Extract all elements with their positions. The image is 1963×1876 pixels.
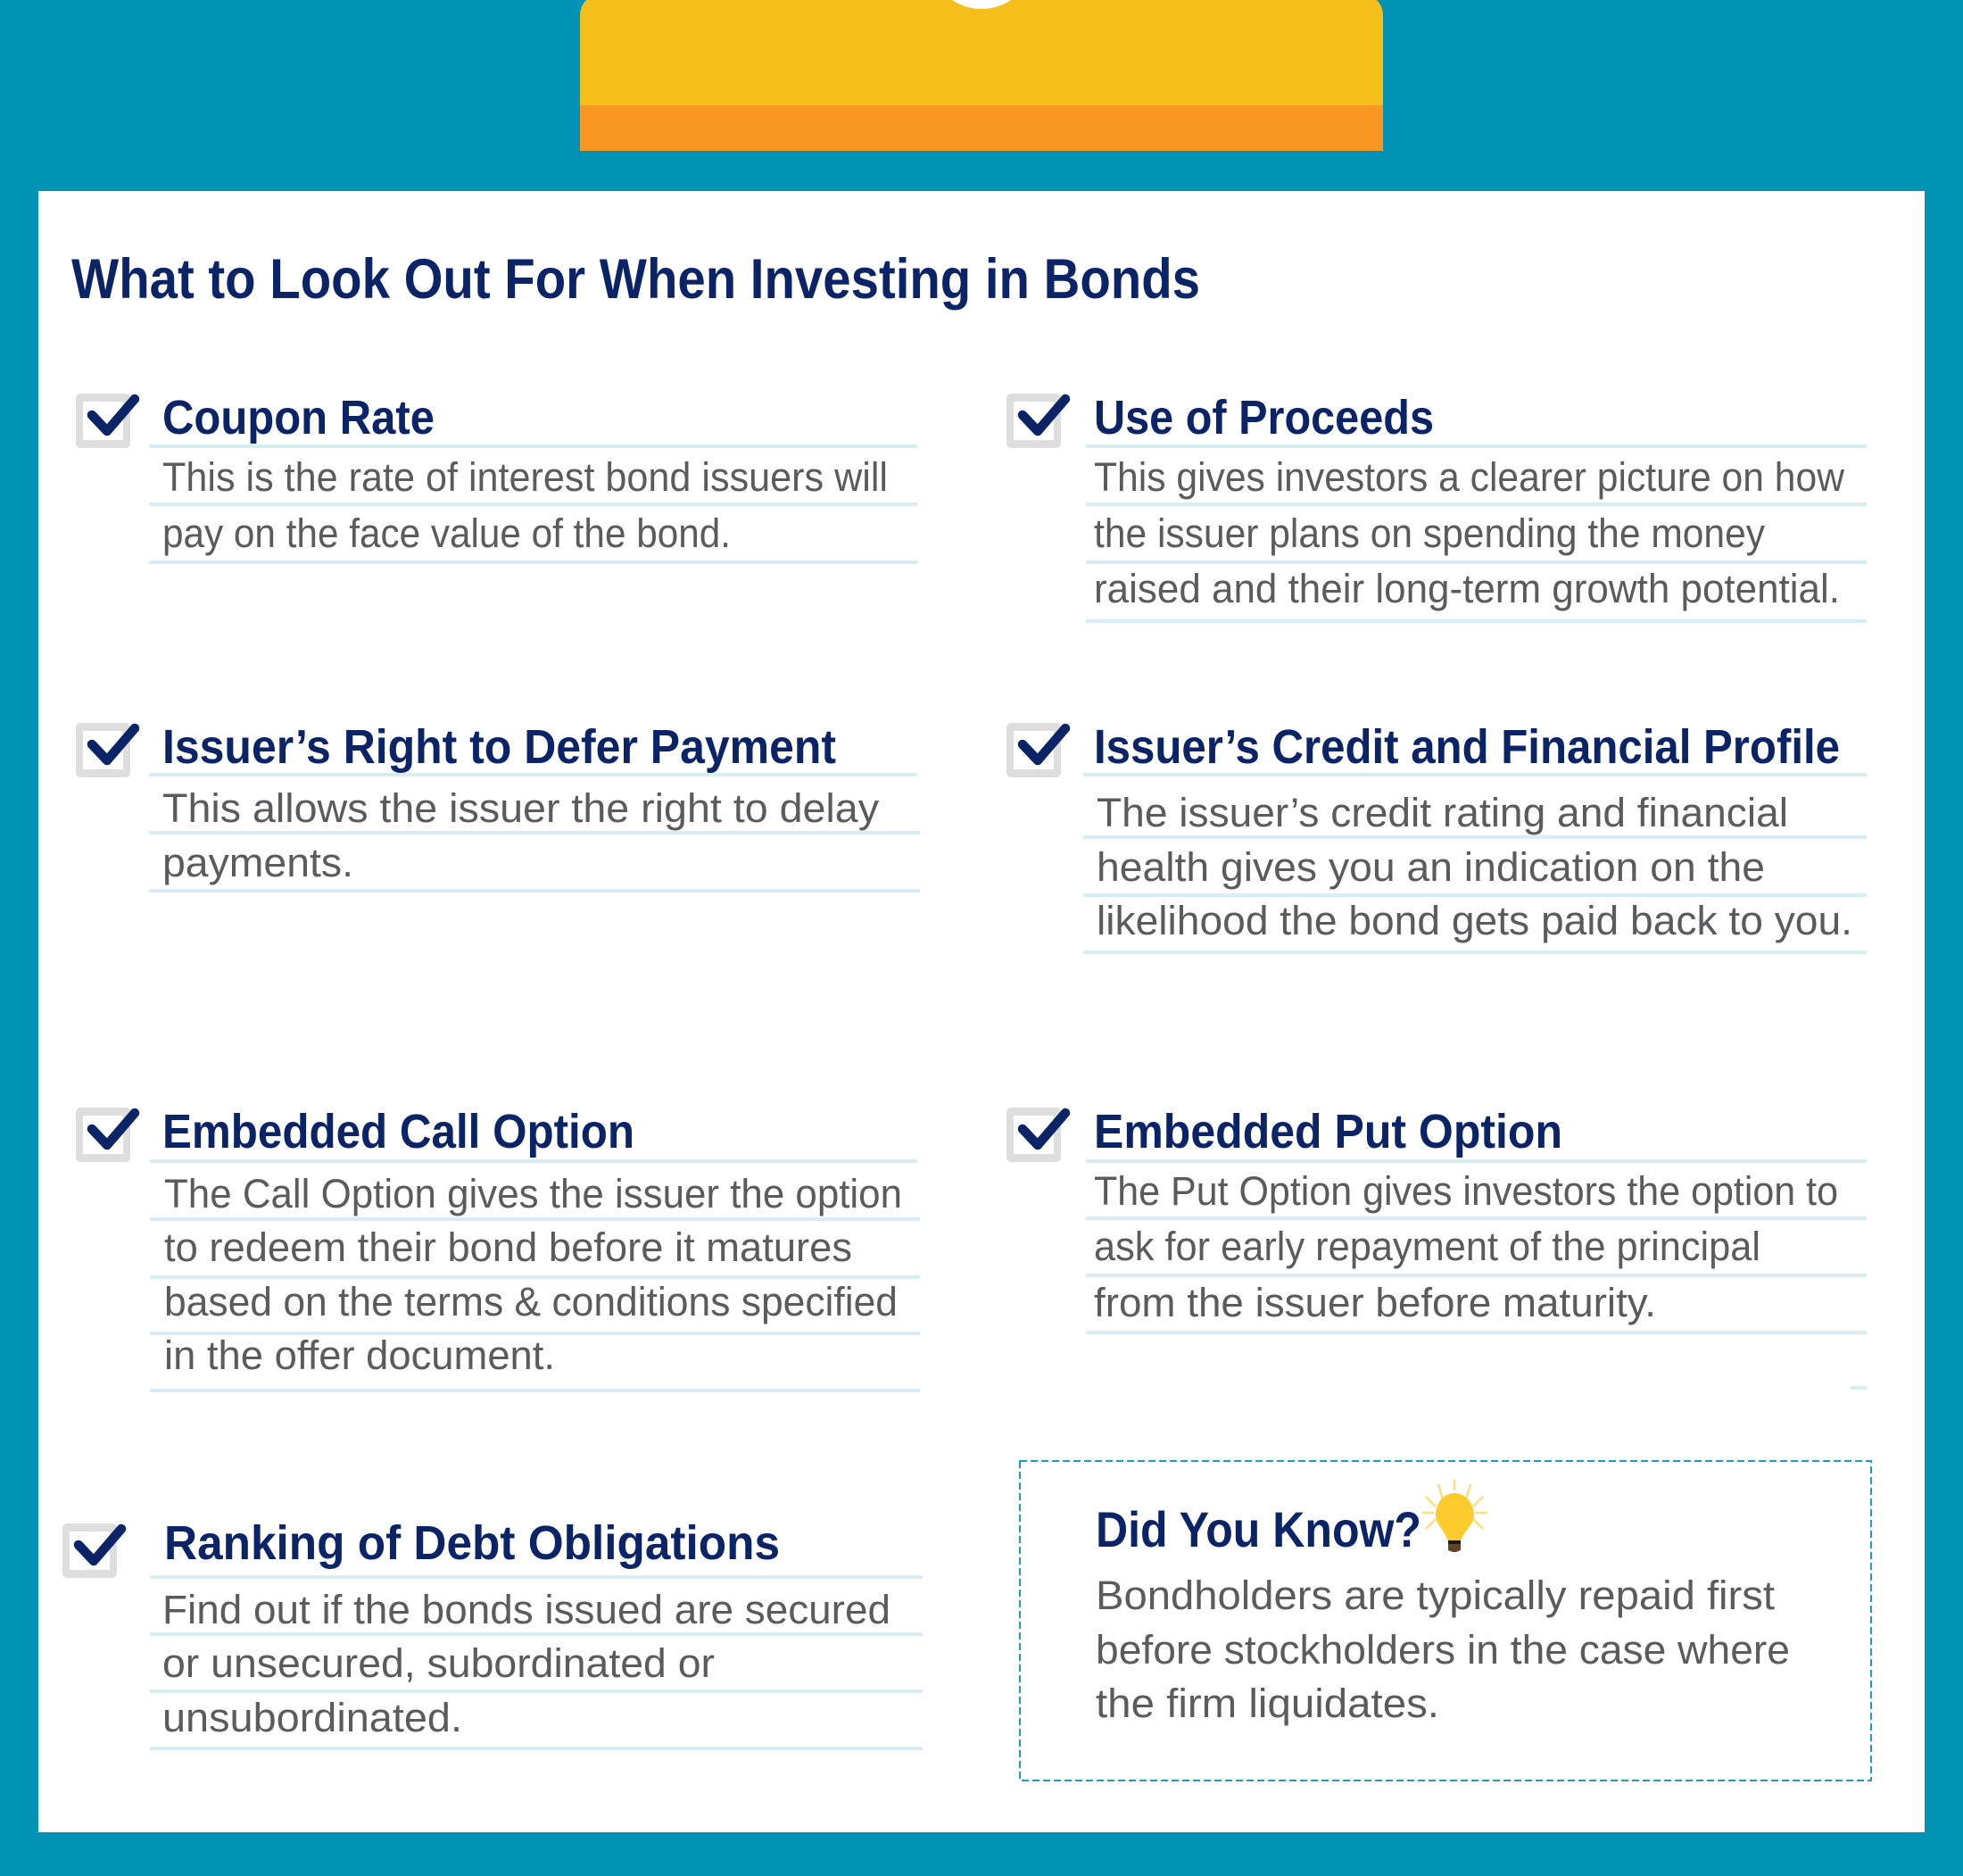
item: Issuer's Credit and Financial Profile — [1006, 720, 1867, 952]
heading: Ranking of Debt Obligations — [164, 1516, 780, 1570]
body text — [162, 785, 880, 885]
callout body: before stockholders in the case where — [1096, 1627, 1790, 1673]
heading: Issuer’s Credit and Financial Profile — [1094, 720, 1840, 774]
callout: Did You Know — [1020, 1461, 1871, 1781]
body text — [1097, 790, 1852, 943]
title: What to Look Out For When Investing in Bonds — [71, 248, 1200, 311]
body text: raised and their long-term growth potential. — [1094, 566, 1840, 611]
body text: This is the rate of interest bond issuers will — [162, 454, 888, 500]
body text: from the issuer before maturity. — [1094, 1280, 1656, 1325]
icon: light bulb — [1422, 1480, 1487, 1552]
heading: Use of Proceeds — [1094, 391, 1434, 444]
body text: likelihood the bond gets paid back to you. — [1097, 898, 1852, 943]
body text — [1094, 454, 1844, 611]
body text: The issuer’s credit rating and financial — [1097, 790, 1788, 835]
body text: payments. — [162, 840, 353, 885]
body text: ask for early repayment of the principal — [1094, 1224, 1760, 1269]
body text: The Call Option gives the issuer the option — [164, 1171, 902, 1216]
body text: unsubordinated. — [162, 1695, 462, 1740]
body text: in the offer document. — [164, 1332, 555, 1378]
icon: checkbox — [76, 723, 135, 777]
body text: The Put Option gives investors the option to — [1094, 1168, 1838, 1214]
item: Coupon Rate — [76, 391, 917, 562]
body text — [164, 1171, 902, 1378]
body text — [1094, 1168, 1838, 1325]
callout body: Bondholders are typically repaid first — [1096, 1573, 1776, 1618]
body text: pay on the face value of the bond. — [162, 511, 731, 556]
body text: or unsecured, subordinated or — [162, 1640, 715, 1686]
heading: Embedded Call Option — [162, 1105, 634, 1158]
body text: This gives investors a clearer picture on how — [1094, 454, 1844, 500]
callout heading: Did You Know? — [1096, 1501, 1421, 1557]
body text: health gives you an indication on the — [1097, 844, 1765, 890]
item: Use of Proceeds — [1006, 391, 1867, 621]
body text: the issuer plans on spending the money — [1094, 511, 1765, 556]
icon: checkbox — [1006, 723, 1065, 777]
icon: checkbox — [76, 1108, 135, 1162]
body text — [162, 454, 888, 556]
body text: This allows the issuer the right to delay — [162, 785, 880, 831]
heading: Issuer’s Right to Defer Payment — [162, 720, 836, 774]
icon: checkbox — [1006, 1108, 1065, 1162]
body text: Find out if the bonds issued are secured — [162, 1587, 890, 1632]
item: Ranking of Debt Obligations — [62, 1516, 923, 1748]
icon: checkbox — [76, 394, 135, 448]
item: Embedded Put Option — [1006, 1105, 1867, 1388]
callout body: the firm liquidates. — [1096, 1681, 1439, 1726]
folder tab — [580, 0, 1383, 151]
callout body — [1096, 1573, 1790, 1726]
icon: checkbox — [1006, 394, 1065, 448]
heading: Embedded Put Option — [1094, 1105, 1562, 1158]
body text — [162, 1587, 890, 1740]
item: Issuer's Right to Defer Payment — [76, 720, 920, 891]
icon: checkbox — [62, 1523, 121, 1578]
heading: Coupon Rate — [162, 391, 435, 444]
item: Embedded Call Option — [76, 1105, 920, 1390]
body text: based on the terms & conditions specified — [164, 1279, 898, 1324]
body text: to redeem their bond before it matures — [164, 1224, 852, 1270]
